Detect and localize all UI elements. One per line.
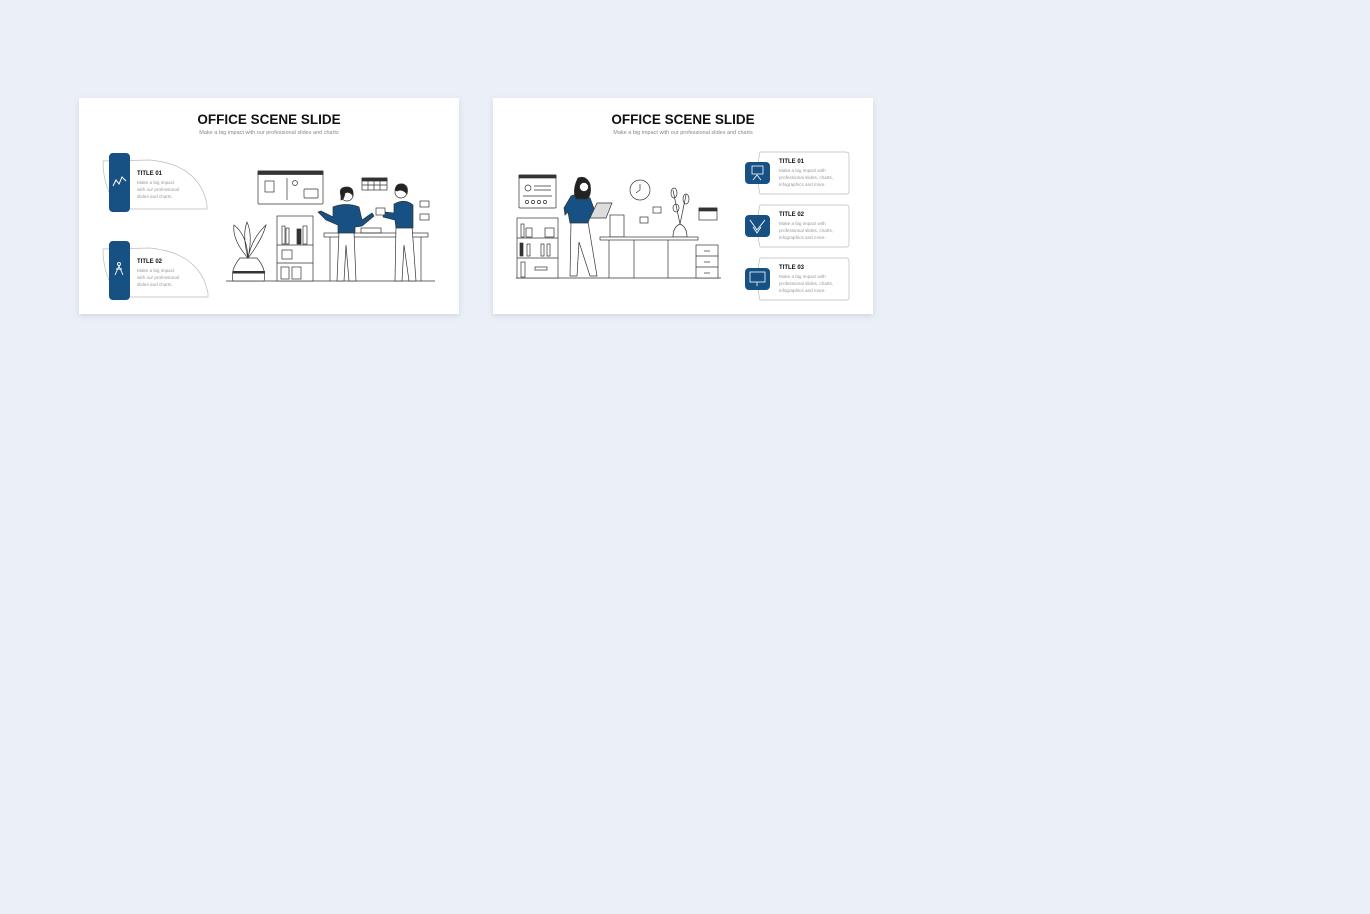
icon: board [752,166,763,180]
card: title 03: Make a big impact with [779,274,826,279]
panel: title 02: TITLE 02 [137,259,163,265]
slide 2 title: OFFICE SCENE SLIDE [611,112,755,127]
card: title 02: infographics and more. [779,235,826,240]
panel: title 01: Make a big impact [137,180,175,185]
card: title 02: TITLE 02 [779,212,805,218]
slide 1 title: OFFICE SCENE SLIDE [197,112,341,127]
panel: title 01: with our professional [137,187,179,192]
slide 2 [493,98,873,314]
card: title 02: Make a big impact with [779,221,826,226]
card: title 01 [745,152,849,194]
card: title 03: infographics and more. [779,288,826,293]
icon: chart [113,177,126,186]
panel: title 02: slides and charts. [137,282,173,287]
slide 2 subtitle: Make a big impact with our professional slides and charts [613,130,753,136]
card: title 03: TITLE 03 [779,265,805,271]
card: title 03 [745,258,849,300]
panel: title 01: TITLE 01 [137,171,163,177]
slide 1 subtitle: Make a big impact with our professional slides and charts [199,130,339,136]
desk [324,233,428,237]
panel: title 01: slides and charts. [137,194,173,199]
panel: title 02 [103,241,208,300]
slide 1 [79,98,459,314]
illustration: woman with laptop [516,175,721,278]
panel: title 01 [103,153,207,212]
calendar [362,178,387,190]
card: title 01: Make a big impact with [779,168,826,173]
bookshelf [277,216,313,281]
browser window [258,171,323,204]
icon: people [115,262,123,275]
card: title 02: professional slides, charts, [779,228,833,233]
icon: monitor [750,272,765,286]
plant [232,258,265,281]
icon: handshake [750,220,765,233]
card: title 01: professional slides, charts, [779,175,833,180]
card: title 01: infographics and more. [779,182,826,187]
woman [337,232,356,281]
card: title 03: professional slides, charts, [779,281,833,286]
card: title 02 [745,205,849,247]
card: title 01: TITLE 01 [779,159,805,165]
panel: title 02: Make a big impact [137,268,175,273]
panel: title 02: with our professional [137,275,179,280]
illustration: office meeting [226,171,435,281]
man [395,226,416,281]
